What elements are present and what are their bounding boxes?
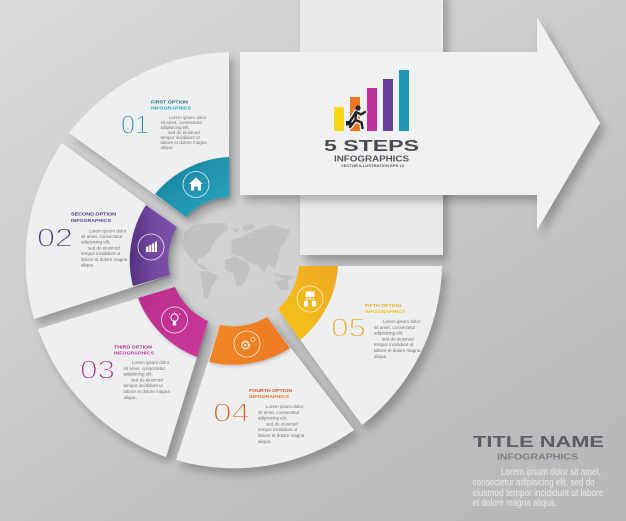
paragraph: sed do eiusmod <box>382 336 414 341</box>
paragraph: sit amet, consectetur <box>160 120 203 125</box>
icon: home <box>183 172 209 198</box>
segment 2 <box>26 143 177 319</box>
paragraph: adipisicing elit, <box>81 240 110 244</box>
heading: FIRST OPTION <box>151 100 189 104</box>
paragraph: adipisicing elit, <box>258 416 287 421</box>
paragraph: Lorem ipsum dolor <box>132 360 170 365</box>
paragraph: Lorem ipsum dolor <box>383 319 421 324</box>
heading: THIRD OPTION <box>114 344 153 350</box>
paragraph: labore et dolore magna <box>160 140 207 145</box>
paragraph: sit amet, consectetur <box>124 366 166 371</box>
panel: step 5 <box>278 266 442 425</box>
paragraph: labore et dolore magna <box>124 389 170 394</box>
paragraph: sit amet, consectetur <box>81 234 123 239</box>
paragraph: sed do eiusmod <box>88 245 120 250</box>
heading: INFOGRAPHICS <box>365 309 405 314</box>
heading <box>249 388 293 399</box>
segment 3 <box>38 287 208 457</box>
paragraph: Lorem ipsum dolor <box>89 228 127 234</box>
paragraph: tempor incididunt ut <box>374 342 414 347</box>
ring 5 yellow <box>278 266 338 340</box>
ring 3 magenta <box>138 287 208 357</box>
panel: step 2 <box>26 143 177 319</box>
title block: consectetur adipisicing elit, sed do <box>472 478 595 488</box>
paragraph: aliqua. <box>160 145 174 150</box>
segment 4 <box>176 317 354 468</box>
paragraph: labore et dolore magna <box>258 433 305 438</box>
heading <box>114 344 154 356</box>
paragraph: tempor incididunt ut <box>81 251 121 256</box>
heading <box>365 303 405 314</box>
ring 4 orange <box>209 317 290 365</box>
paragraph: sed do eiusmod <box>168 130 200 135</box>
paragraph: sit amet, consectetur <box>374 325 416 330</box>
paragraph: aliqua. <box>258 439 271 444</box>
paragraph: tempor incididunt ut <box>258 427 298 432</box>
panel: step 3 <box>38 287 208 457</box>
icon: org chart <box>297 286 323 312</box>
icon: gears <box>234 331 260 357</box>
heading: FIFTH OPTION <box>365 303 402 308</box>
heading: INFOGRAPHICS <box>249 394 289 399</box>
paragraph: labore et dolore magna <box>374 348 421 353</box>
number 05: 05 <box>331 312 366 342</box>
panel: step 4 <box>176 317 354 468</box>
paragraph: Lorem ipsum dolor <box>169 115 207 120</box>
heading: 5 steps: 5 STEPS <box>324 138 419 155</box>
paragraph: sit amet, consectetur <box>258 410 300 415</box>
heading <box>151 100 191 110</box>
number 04: 04 <box>213 398 250 428</box>
heading: SECOND OPTION <box>71 212 117 216</box>
paragraph: adipisicing elit, <box>160 125 190 130</box>
heading: 5 steps: INFOGRAPHICS <box>334 154 410 164</box>
heading <box>71 212 117 223</box>
paragraph: sed do eiusmod <box>131 377 163 382</box>
paragraph: sed do eiusmod <box>266 421 298 426</box>
icon: light bulb <box>162 307 188 333</box>
world map <box>183 223 295 298</box>
heading: INFOGRAPHICS <box>71 218 111 223</box>
paragraph: tempor incididunt ut <box>124 383 164 388</box>
title block: Lorem ipsum dolor sit amet, <box>501 467 601 478</box>
vertical paper strip <box>300 0 443 255</box>
ring 1 teal <box>155 157 229 217</box>
heading: 5 steps: VECTOR ILLUSTRATION EPS 10 <box>341 164 404 168</box>
number 01: 01 <box>121 110 149 140</box>
heading: 5 steps <box>324 138 419 168</box>
number 03: 03 <box>80 354 115 384</box>
hub glow <box>139 167 329 357</box>
icon: running businessman <box>346 105 365 128</box>
bar chart logo <box>334 70 409 131</box>
paragraph: Lorem ipsum dolor <box>266 404 304 409</box>
panel: step 1 <box>69 52 229 217</box>
title block: TITLE NAME <box>473 434 604 451</box>
paragraph: tempor incididunt ut <box>160 135 201 140</box>
ring 2 purple <box>130 205 177 286</box>
title block: INFOGRAPHICS <box>497 452 578 462</box>
paragraph: aliqua. <box>374 354 387 359</box>
heading: INFOGRAPHICS <box>114 350 154 356</box>
paragraph: adipisicing elit, <box>374 331 403 336</box>
title block: et dolore magna aliqua. <box>472 498 556 509</box>
segment 1 <box>69 52 229 217</box>
paragraph: aliqua. <box>124 395 137 400</box>
segment 5 <box>278 266 442 425</box>
paragraph: labore et dolore magna <box>81 257 128 262</box>
heading: INFOGRAPHICS <box>151 106 191 110</box>
heading: FOURTH OPTION <box>249 388 293 393</box>
number 02: 02 <box>37 222 73 252</box>
paragraph: adipisicing elit, <box>124 372 153 377</box>
icon: growth chart <box>138 234 164 260</box>
title block <box>472 434 604 509</box>
paragraph: aliqua. <box>81 263 94 268</box>
arrow <box>240 17 600 230</box>
